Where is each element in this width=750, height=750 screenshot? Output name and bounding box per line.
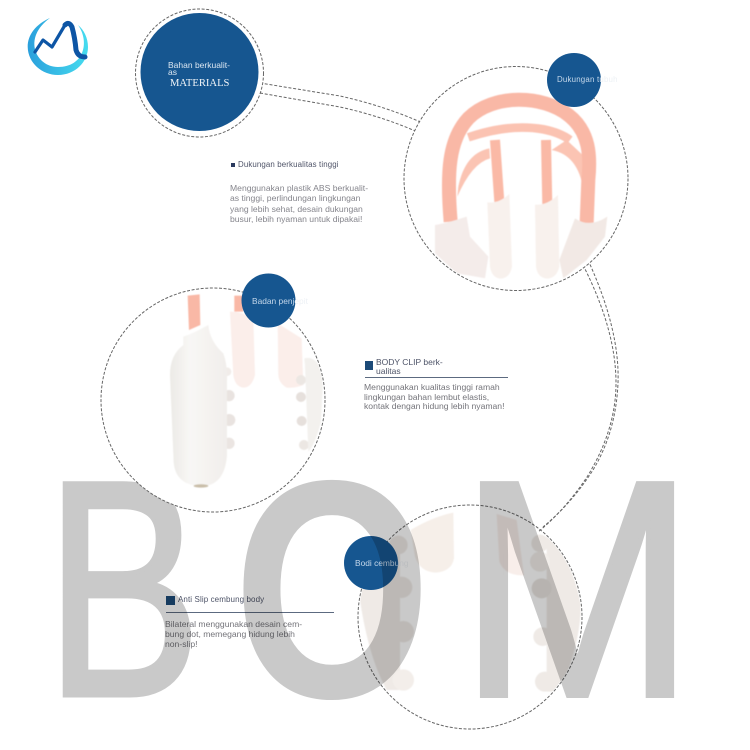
blue badge circle: clip body xyxy=(242,274,296,328)
text: body clip description: Menggunakan kualitas tinggi ramah xyxy=(364,382,500,392)
heading: Anti Slip xyxy=(166,595,334,613)
badge text: materials xyxy=(168,60,230,89)
badge text: materials: MATERIALS xyxy=(170,78,229,89)
text: high quality support description: yang lebih sehat, desain dukungan xyxy=(230,204,363,214)
text: body clip description xyxy=(364,382,504,411)
heading: Anti Slip: Anti Slip cembung body xyxy=(178,595,264,604)
text: body clip description: lingkungan bahan lembut elastis, xyxy=(364,392,489,402)
text: high quality support description: Menggunakan plastik ABS berkualit- xyxy=(230,183,368,193)
heading: BODY CLIP xyxy=(365,357,508,378)
text: high quality support description xyxy=(230,183,368,224)
panel: arch support detail xyxy=(404,53,628,291)
heading: Dukungan berkualitas tinggi: Dukungan berkualitas tinggi xyxy=(238,160,339,169)
text: high quality support description: busur, lebih nyaman untuk dipakai! xyxy=(230,214,362,224)
badge text: materials: as xyxy=(168,67,177,77)
product: nose clip body close-up xyxy=(360,513,581,692)
badge label: Bodi cembung: Bodi cembung xyxy=(355,558,409,568)
badge text: materials: Bahan berkualit- xyxy=(168,60,230,70)
product: pink arch and clip xyxy=(435,100,607,279)
product: clip body with bumps xyxy=(170,294,323,488)
text: anti slip description: Bilateral menggunakan desain cem- xyxy=(165,619,302,629)
text: anti slip description xyxy=(165,619,302,649)
text: body clip description: kontak dengan hidung lebih nyaman! xyxy=(364,401,504,411)
dashed ring: bottom detail xyxy=(358,505,582,729)
text: anti slip description: non-slip! xyxy=(165,639,197,649)
text: high quality support description: as tinggi, perlindungan lingkungan xyxy=(230,193,360,203)
badge label: Dukungan tubuh: Dukungan tubuh xyxy=(557,75,618,84)
logo xyxy=(28,18,88,75)
panel: body clip detail xyxy=(100,274,326,512)
heading: BODY CLIP: ualitas xyxy=(376,366,401,376)
blue badge circle: body xyxy=(344,536,398,590)
badge label: Badan penjepit: Badan penjepit xyxy=(252,296,308,306)
heading: BODY CLIP: BODY CLIP berk- xyxy=(376,357,443,367)
bottom detail graphic xyxy=(344,504,582,730)
blue badge circle: support xyxy=(547,53,601,107)
text: anti slip description: bung dot, memegang hidung lebih xyxy=(165,629,295,639)
